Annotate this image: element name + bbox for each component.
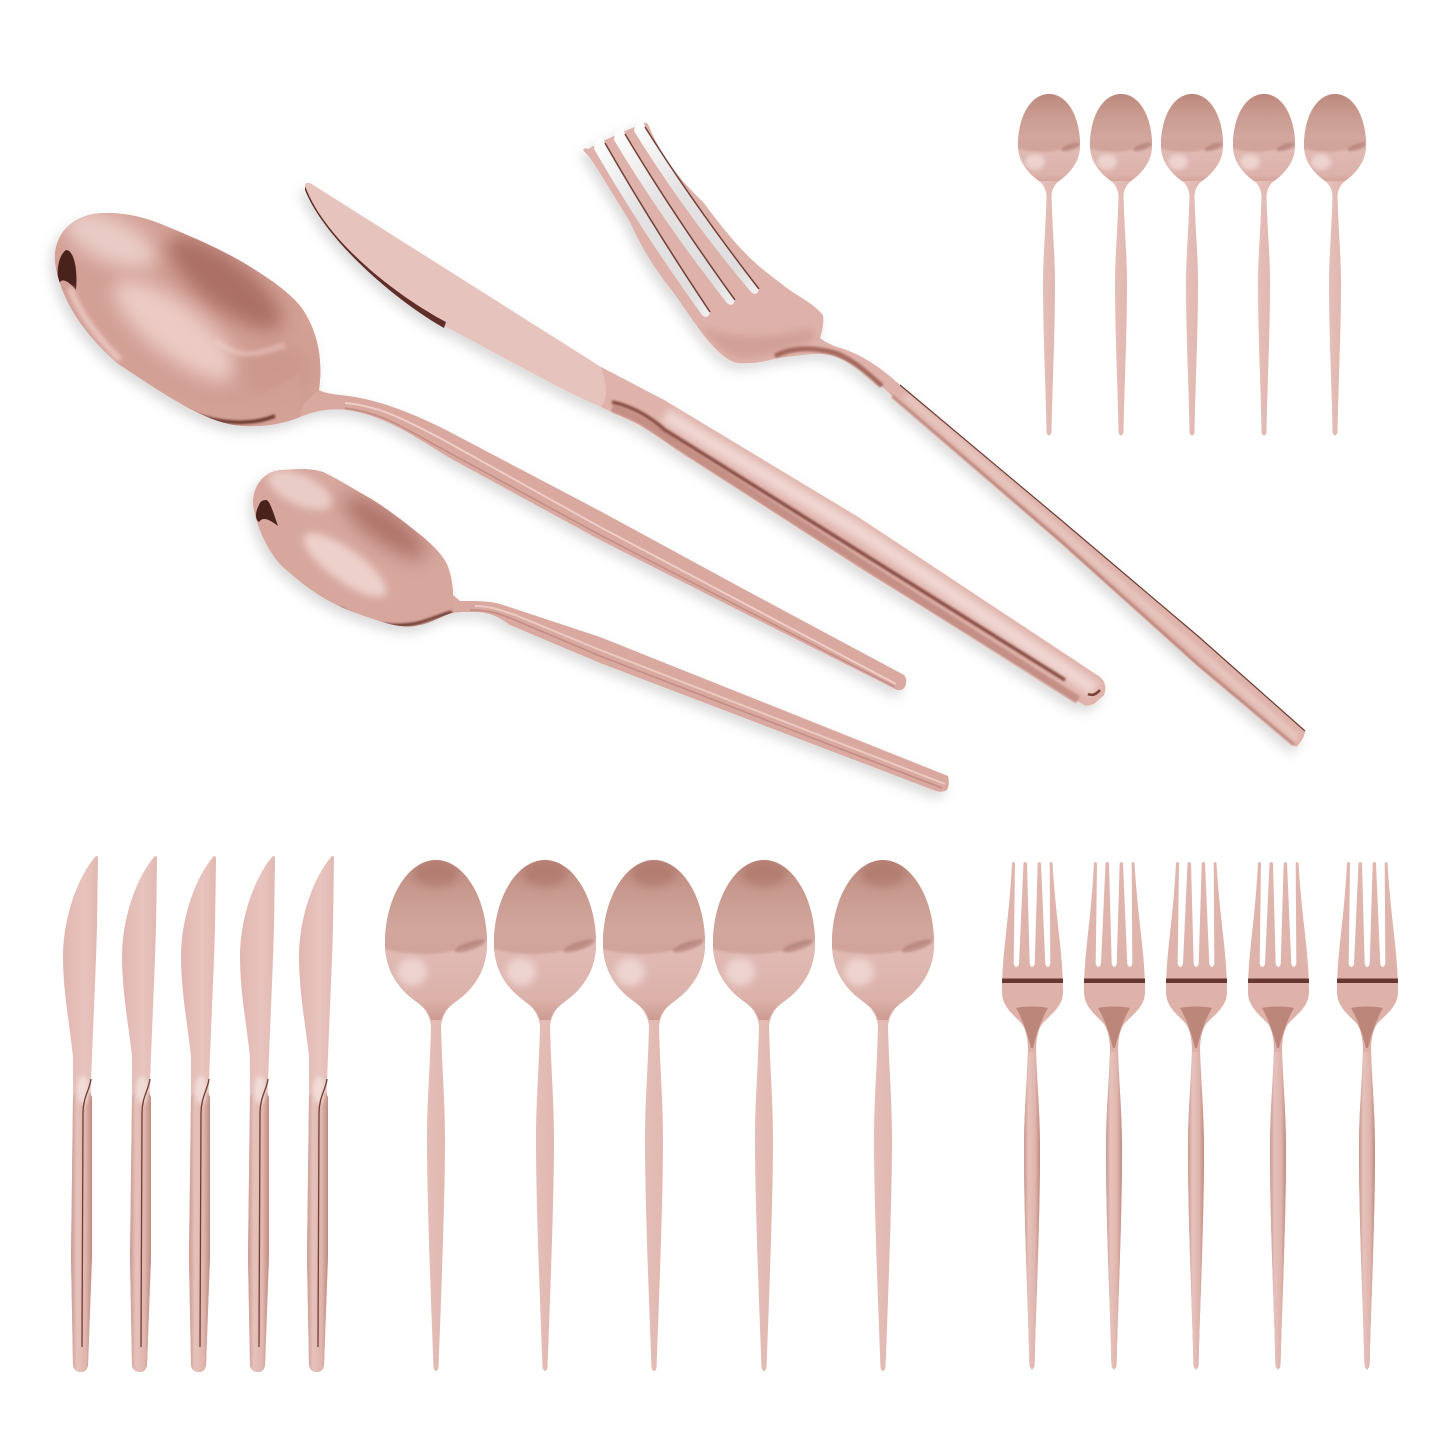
dinner knife [305,183,1105,706]
table forks row [1002,862,1398,1370]
large serving spoon [40,199,906,690]
tine slots [594,121,759,317]
table knives row [63,856,334,1372]
teaspoons row [1016,94,1368,436]
dinner fork [583,121,1305,747]
dessert spoon [245,460,949,792]
table spoons row [381,860,938,1371]
